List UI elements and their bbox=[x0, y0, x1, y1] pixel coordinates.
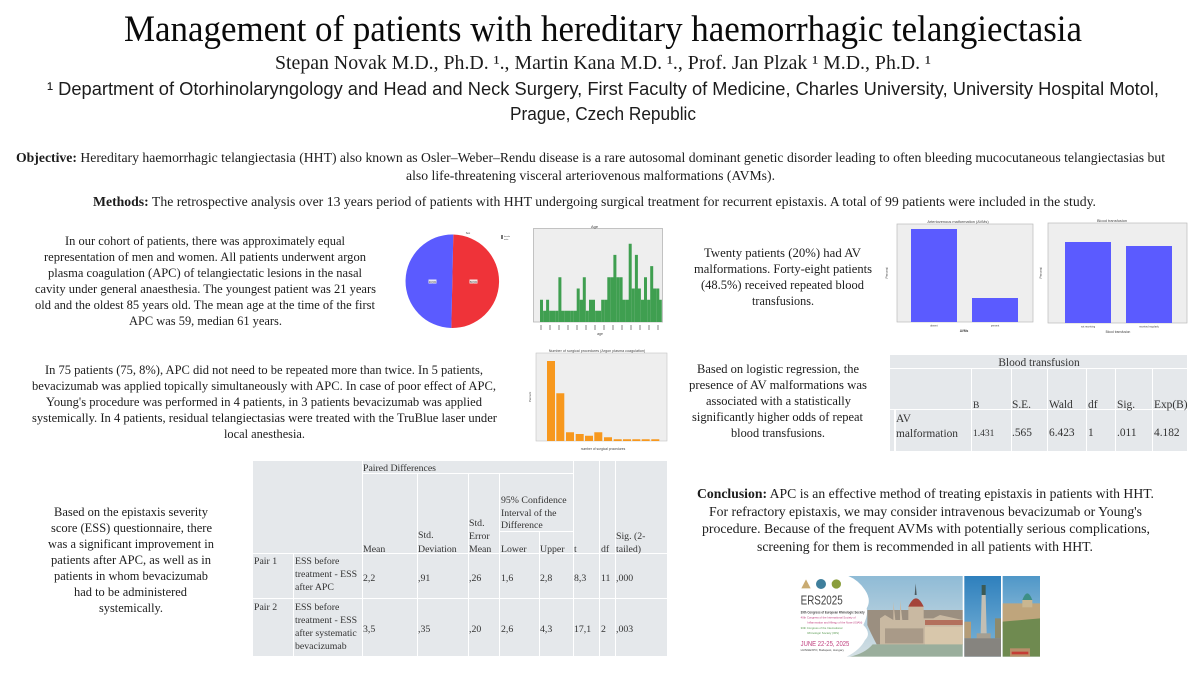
bar chart: arteriovenous malformation: present bbox=[991, 324, 999, 328]
text block: AV malformations: (48.5%) received repeated blood bbox=[701, 277, 864, 292]
table: paired differences: Paired Differences bbox=[363, 463, 436, 474]
text block: cohort bbox=[35, 233, 376, 328]
bar chart: blood transfusion: received regularly bbox=[1139, 326, 1160, 328]
text block: procedures: Young's procedure was performed in 4 patients, in 3 patients bevacizumab was applied bbox=[46, 394, 482, 409]
pie chart: sex: 49,5% bbox=[429, 280, 437, 284]
authors: Stepan Novak M.D., Ph.D. ¹., Martin Kana M.D. ¹., Prof. Jan Plzak ¹ M.D., Ph.D. ¹ bbox=[275, 53, 931, 74]
congress details bbox=[801, 592, 865, 652]
text block: procedures bbox=[32, 362, 498, 441]
text block: cohort: old and the oldest 85 years old. The mean age at the time of the first bbox=[35, 297, 375, 312]
table: blood transfusion regression: .565 bbox=[1012, 427, 1032, 439]
table: paired differences: 2 bbox=[601, 624, 606, 635]
bar chart: age: age bbox=[597, 332, 603, 336]
methods text: Methods: The retrospective analysis over 13 years period of patients with HHT undergoing surgical treatment for recurrent epistaxis. A total of 99 patients were included in the study. bbox=[93, 194, 1096, 209]
table: paired differences: Interval of the bbox=[501, 508, 557, 519]
table: paired differences: 1,6 bbox=[501, 573, 513, 584]
text block: ESS: had to be administered bbox=[74, 584, 187, 599]
pie chart: sex: female bbox=[504, 236, 511, 238]
text block: ESS: score (ESS) questionnaire, there bbox=[51, 520, 212, 535]
table: blood transfusion regression: 6.423 bbox=[1049, 427, 1075, 439]
text block: logistic regression bbox=[689, 361, 867, 440]
bar chart: age bbox=[534, 224, 662, 336]
text block: procedures: bevacizumab was applied topically simultaneously with APC. In case of poor effect of APC, bbox=[32, 378, 496, 393]
text block: cohort: representation of men and women. All patients underwent argon bbox=[44, 249, 366, 264]
objective text: also life-threatening visceral arteriovenous malformations (AVMs). bbox=[406, 168, 775, 184]
table: paired differences: 3,5 bbox=[363, 624, 375, 635]
table: paired differences: 2,8 bbox=[540, 573, 552, 584]
table: paired differences: Std. bbox=[418, 530, 434, 541]
conclusion: For refractory epistaxis, we may consider intravenous bevacizumab or Young's bbox=[709, 504, 1142, 519]
bar chart: blood transfusion bbox=[1039, 218, 1187, 334]
photo: parliament bbox=[847, 576, 963, 657]
text block: ESS: patients in whom bevacizumab bbox=[54, 568, 208, 583]
congress details: ERS2025 bbox=[801, 592, 843, 607]
table: blood transfusion regression: malformation bbox=[896, 428, 958, 440]
table: paired differences: ,003 bbox=[616, 624, 633, 635]
table: paired differences: Pair 1 bbox=[254, 556, 277, 567]
photo: column bbox=[964, 576, 1001, 657]
table: blood transfusion regression: .011 bbox=[1117, 427, 1137, 439]
text block: ESS: patients after APC, as well as in bbox=[51, 552, 211, 567]
table: paired differences: treatment - ESS bbox=[295, 615, 357, 626]
table: paired differences: Pair 2 bbox=[254, 602, 277, 613]
table: blood transfusion regression: 4.182 bbox=[1154, 427, 1180, 439]
text block: ESS: was a significant improvement in bbox=[48, 536, 214, 551]
text block: procedures: local anesthesia. bbox=[224, 426, 305, 441]
bar chart: arteriovenous malformation: AVMs bbox=[960, 329, 969, 333]
text block: ESS: systemically. bbox=[99, 600, 163, 615]
conclusion: Conclusion: APC is an effective method of treating epistaxis in patients with HHT. bbox=[697, 486, 1154, 501]
text block: logistic regression: Based on logistic regression, the bbox=[697, 361, 859, 376]
bar chart: number of surgical procedures: Percent bbox=[528, 392, 532, 402]
text block: AV malformations: transfusions. bbox=[752, 293, 814, 308]
table: paired differences: 95% Confidence bbox=[501, 495, 567, 506]
table: paired differences: bevacizumab bbox=[295, 641, 347, 652]
bar chart: arteriovenous malformation: Arteriovenous malformation (AVMs) bbox=[927, 219, 989, 224]
text block: logistic regression: blood transfusions. bbox=[731, 425, 825, 440]
pie chart: sex: Sex bbox=[466, 231, 471, 235]
table: paired differences: ,26 bbox=[469, 573, 481, 584]
bar chart: blood transfusion: not receiving bbox=[1081, 326, 1096, 328]
text block: ESS bbox=[48, 504, 214, 615]
table: paired differences: Std. bbox=[469, 518, 485, 529]
bar chart: arteriovenous malformation bbox=[885, 219, 1033, 333]
table: paired differences: Mean bbox=[469, 544, 491, 555]
table: paired differences: Error bbox=[469, 531, 490, 542]
congress details: 30th Congress of the International bbox=[801, 626, 843, 630]
conclusion bbox=[697, 486, 1154, 554]
text block: AV malformations: malformations. Forty-eight patients bbox=[694, 261, 872, 276]
table: paired differences: Sig. (2- bbox=[616, 531, 645, 542]
text block: logistic regression: presence of AV malformations was bbox=[689, 377, 867, 392]
table: paired differences: ,91 bbox=[418, 573, 430, 584]
congress details: 39th Congress of European Rhinologic Society bbox=[801, 611, 865, 615]
bar chart: blood transfusion: Percent bbox=[1039, 267, 1043, 278]
table: blood transfusion regression: 1 bbox=[1088, 427, 1094, 439]
table: paired differences: treatment - ESS bbox=[295, 569, 357, 580]
text block: cohort: plasma coagulation (APC) of telangiectatic lesions in the nasal bbox=[48, 265, 362, 280]
icon: society emblems bbox=[801, 579, 841, 589]
table: blood transfusion regression: AV bbox=[896, 413, 912, 425]
bar chart: blood transfusion: Blood transfusion bbox=[1106, 330, 1131, 334]
pie chart: sex: male bbox=[504, 239, 509, 241]
text block: cohort: In our cohort of patients, there was approximately equal bbox=[65, 233, 345, 248]
bar chart: arteriovenous malformation: absent bbox=[930, 324, 938, 328]
affiliation: ¹ Department of Otorhinolaryngology and Head and Neck Surgery, First Faculty of Medicine, Charles University, University Hospital Motol, bbox=[47, 78, 1159, 99]
text block: procedures: In 75 patients (75, 8%), APC did not need to be repeated more than twice. In 5 patients, bbox=[45, 362, 483, 377]
text block: AV malformations bbox=[694, 245, 872, 308]
table: paired differences: Upper bbox=[540, 544, 565, 555]
bar chart: number of surgical procedures: Number of surgical procedures (Argon plasma coagulation) bbox=[549, 349, 645, 353]
table: paired differences: ,20 bbox=[469, 624, 481, 635]
table: paired differences: 8,3 bbox=[574, 573, 586, 584]
bar chart: number of surgical procedures bbox=[528, 349, 667, 451]
table: paired differences: tailed) bbox=[616, 544, 641, 555]
text block: logistic regression: associated with a statistically bbox=[706, 393, 851, 408]
text block: procedures: systemically. In 4 patients, residual telangiectasias were treated with the TruBlue laser under bbox=[32, 410, 498, 425]
table: blood transfusion regression bbox=[890, 355, 1188, 451]
table: paired differences bbox=[253, 461, 667, 656]
table: paired differences: ESS before bbox=[295, 602, 340, 613]
text block: cohort: APC was 59, median 61 years. bbox=[129, 313, 282, 328]
table: paired differences: 11 bbox=[601, 573, 611, 584]
table: blood transfusion regression: df bbox=[1088, 399, 1098, 411]
photo: buda castle bbox=[1003, 576, 1040, 657]
pie chart: sex bbox=[406, 231, 511, 328]
table: blood transfusion regression: S.E. bbox=[1012, 399, 1031, 411]
table: blood transfusion regression: Blood transfusion bbox=[998, 357, 1080, 369]
objective text: Objective: Hereditary haemorrhagic telangiectasia (HHT) also known as Osler–Weber–Rendu disease is a rare autosomal dominant genetic disorder leading to often bleeding mucocutaneous telangiectasias but bbox=[16, 150, 1165, 166]
table: paired differences: Lower bbox=[501, 544, 527, 555]
bar chart: arteriovenous malformation: Percent bbox=[885, 267, 889, 278]
table: paired differences: Mean bbox=[363, 544, 385, 555]
bar chart: number of surgical procedures: number of surgical procedures bbox=[581, 447, 626, 451]
title: Management of patients with hereditary haemorrhagic telangiectasia bbox=[124, 8, 1082, 49]
table: paired differences: after systematic bbox=[295, 628, 357, 639]
congress details: 40th Congress of the International Society of bbox=[801, 616, 856, 620]
table: paired differences: ,000 bbox=[616, 573, 633, 584]
pie chart: sex: 50,5% bbox=[470, 280, 478, 284]
conclusion: screening for them is recommended in all patients with HHT. bbox=[757, 539, 1093, 554]
bar chart: age: Age bbox=[591, 224, 599, 229]
table: blood transfusion regression: Exp(B) bbox=[1154, 399, 1188, 411]
congress details: Rhinologic Society (IRS) bbox=[807, 631, 839, 635]
table: paired differences: 4,3 bbox=[540, 624, 552, 635]
table: blood transfusion regression: Sig. bbox=[1117, 399, 1135, 411]
table: paired differences: ESS before bbox=[295, 556, 340, 567]
table: paired differences: t bbox=[574, 544, 577, 555]
objective text bbox=[16, 150, 1165, 184]
text block: ESS: Based on the epistaxis severity bbox=[54, 504, 208, 519]
table: paired differences: after APC bbox=[295, 582, 334, 593]
table: blood transfusion regression: B bbox=[973, 401, 979, 411]
table: paired differences: ,35 bbox=[418, 624, 430, 635]
affiliation: Prague, Czech Republic bbox=[510, 103, 696, 124]
table: blood transfusion regression: 1.431 bbox=[973, 429, 995, 439]
congress details: HUNGEXPO, Budapest, Hungary bbox=[801, 648, 844, 652]
table: paired differences: Difference bbox=[501, 520, 543, 531]
text block: AV malformations: Twenty patients (20%) had AV bbox=[704, 245, 862, 260]
table: paired differences: 17,1 bbox=[574, 624, 591, 635]
table: blood transfusion regression: Wald bbox=[1049, 399, 1073, 411]
table: paired differences: 2,6 bbox=[501, 624, 513, 635]
affiliation bbox=[47, 78, 1159, 124]
text block: cohort: cavity under general anaesthesia. The youngest patient was 21 years bbox=[35, 281, 376, 296]
table: paired differences: Deviation bbox=[418, 544, 457, 555]
bar chart: blood transfusion: Blood transfusion bbox=[1097, 218, 1127, 223]
ERS2025 congress banner bbox=[801, 576, 1040, 657]
conclusion: procedure. Because of the frequent AVMs with potentially serious complications, bbox=[702, 521, 1150, 536]
congress details: JUNE 22-25, 2025 bbox=[801, 641, 849, 648]
table: paired differences: 2,2 bbox=[363, 573, 375, 584]
table: paired differences: df bbox=[601, 544, 610, 555]
text block: logistic regression: significantly higher odds of repeat bbox=[692, 409, 863, 424]
congress details: Inflammation and Allergy of the Nose (ISIAN) bbox=[807, 621, 862, 625]
